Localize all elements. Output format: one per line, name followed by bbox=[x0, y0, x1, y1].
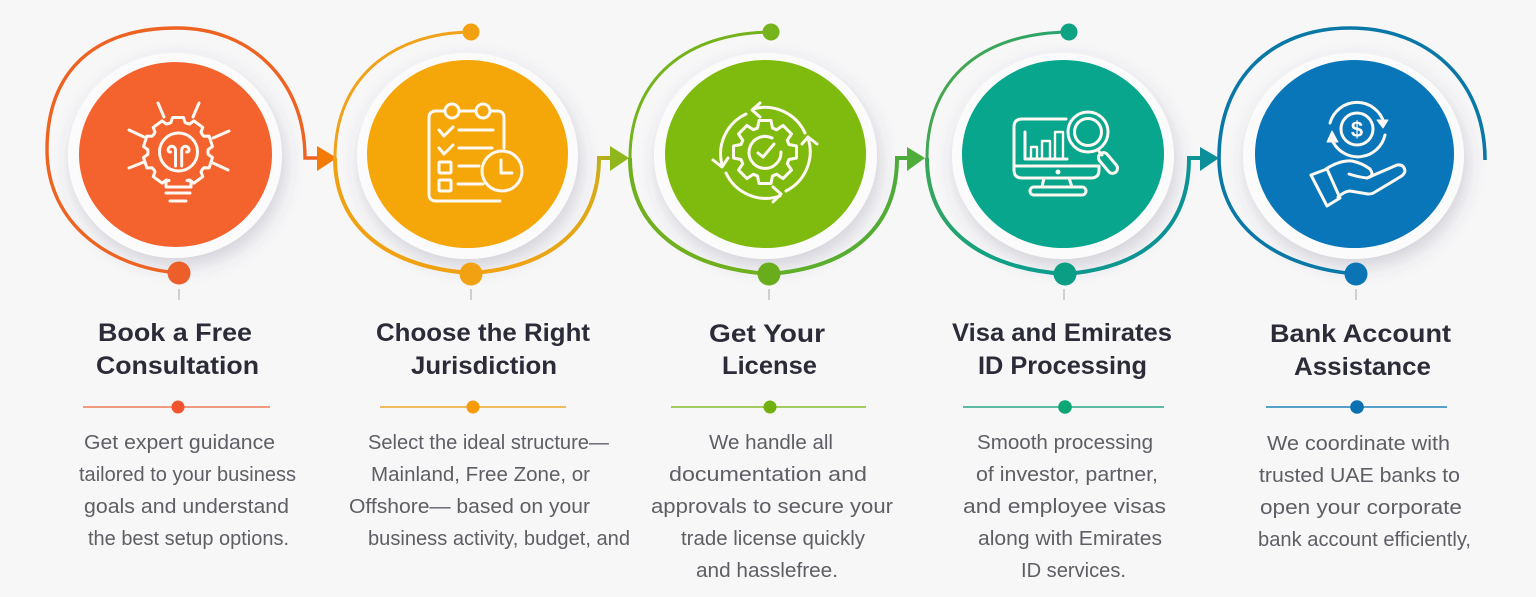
body text 4: Smooth processing bbox=[977, 432, 1153, 454]
body text 5: We coordinate with bbox=[1267, 433, 1450, 455]
body text 5: trusted UAE banks to bbox=[1259, 465, 1460, 487]
divider 2 bbox=[380, 400, 566, 414]
connector arc 3 bbox=[630, 32, 925, 274]
node dot 3 bottom bbox=[758, 262, 780, 286]
node dot 2 top bbox=[462, 24, 480, 40]
heading 3 bbox=[709, 320, 825, 380]
body text 3: and hasslefree. bbox=[696, 560, 838, 582]
stem 2 bbox=[470, 289, 472, 300]
body text 4 bbox=[963, 432, 1166, 582]
panel: step 2 choose the right jurisdiction bbox=[335, 24, 630, 550]
body text 1: goals and understand bbox=[84, 496, 289, 518]
body text 2: business activity, budget, and bbox=[368, 528, 630, 550]
body text 2: Offshore— based on your bbox=[349, 496, 590, 518]
connector arc 5 bbox=[1219, 28, 1485, 274]
white disc 3 bbox=[654, 53, 877, 259]
connector arc 4 bbox=[927, 32, 1219, 274]
heading 3: License bbox=[722, 352, 817, 380]
body text 4: and employee visas bbox=[963, 496, 1166, 518]
body text 1: the best setup options. bbox=[88, 528, 289, 550]
heading 5: Bank Account bbox=[1270, 320, 1452, 348]
body text 4: of investor, partner, bbox=[976, 464, 1158, 486]
colour disc 4 bbox=[962, 60, 1164, 248]
body text 4: ID services. bbox=[1021, 560, 1126, 582]
icon: gear with cycle arrows bbox=[713, 103, 817, 202]
body text 1: tailored to your business bbox=[79, 464, 296, 486]
body text 5: bank account efficiently, bbox=[1258, 529, 1471, 551]
node dot 3 top bbox=[762, 24, 780, 40]
heading 2: Choose the Right bbox=[376, 319, 591, 347]
divider 3 bbox=[671, 400, 866, 414]
body text 5: open your corporate bbox=[1260, 497, 1462, 519]
heading 3: Get Your bbox=[709, 320, 825, 348]
heading 2 bbox=[376, 319, 591, 380]
stem 1 bbox=[178, 289, 180, 300]
node dot 1 bbox=[168, 262, 190, 284]
body text 2: Select the ideal structure— bbox=[368, 432, 609, 454]
body text 2 bbox=[349, 432, 630, 550]
heading 5: Assistance bbox=[1294, 353, 1431, 381]
icon: monitor with chart and magnifier bbox=[1014, 112, 1120, 195]
divider 4 bbox=[963, 400, 1164, 414]
body text 3: documentation and bbox=[669, 464, 867, 486]
divider 1 bbox=[83, 400, 270, 414]
heading 1 bbox=[96, 319, 259, 380]
colour disc 3 bbox=[665, 60, 866, 248]
colour disc 2 bbox=[367, 60, 568, 248]
icon: light bulb gear bbox=[129, 103, 229, 201]
icon: dollar sign: $ bbox=[1351, 117, 1363, 142]
body text 3: approvals to secure your bbox=[651, 496, 893, 518]
heading 4: Visa and Emirates bbox=[952, 319, 1172, 347]
stem 4 bbox=[1063, 289, 1065, 300]
body text 5 bbox=[1258, 433, 1471, 551]
body text 3 bbox=[651, 432, 893, 582]
panel: step 3 get your license bbox=[630, 24, 925, 582]
colour disc 5 bbox=[1255, 60, 1454, 248]
connector arc 1 with arrow bbox=[47, 28, 337, 273]
node dot 4 bottom bbox=[1054, 262, 1076, 286]
panel: step 5 bank account assistance bbox=[1219, 28, 1485, 551]
body text 1: Get expert guidance bbox=[84, 432, 275, 454]
node dot 2 bottom bbox=[460, 262, 482, 286]
panel: step 1 book a free consultation bbox=[47, 28, 337, 550]
body text 4: along with Emirates bbox=[978, 528, 1162, 550]
white disc 2 bbox=[357, 53, 578, 259]
connector arc 2 top bbox=[335, 32, 471, 158]
body text 3: We handle all bbox=[709, 432, 833, 454]
icon: checklist with clock bbox=[429, 104, 522, 201]
stem 3 bbox=[768, 289, 770, 300]
body text 1 bbox=[79, 432, 296, 550]
stem 5 bbox=[1355, 289, 1357, 300]
icon: hand holding dollar coin bbox=[1311, 102, 1405, 206]
connector arc 2 bottom with arrow bbox=[335, 146, 629, 273]
body text 3: trade license quickly bbox=[681, 528, 865, 550]
node dot 5 bbox=[1344, 262, 1368, 286]
colour disc 1 bbox=[79, 62, 272, 247]
heading 4 bbox=[952, 319, 1172, 380]
body text 2: Mainland, Free Zone, or bbox=[371, 464, 590, 486]
white disc 1 bbox=[68, 53, 282, 258]
heading 5 bbox=[1270, 320, 1452, 381]
white disc 5 bbox=[1243, 53, 1464, 259]
heading 1: Book a Free bbox=[98, 319, 252, 347]
white disc 4 bbox=[952, 53, 1174, 259]
heading 2: Jurisdiction bbox=[411, 352, 557, 380]
node dot 4 top bbox=[1060, 24, 1078, 40]
panel: step 4 visa and emirates id processing bbox=[927, 24, 1219, 582]
heading 4: ID Processing bbox=[978, 352, 1147, 380]
heading 1: Consultation bbox=[96, 352, 259, 380]
divider 5 bbox=[1266, 400, 1447, 414]
